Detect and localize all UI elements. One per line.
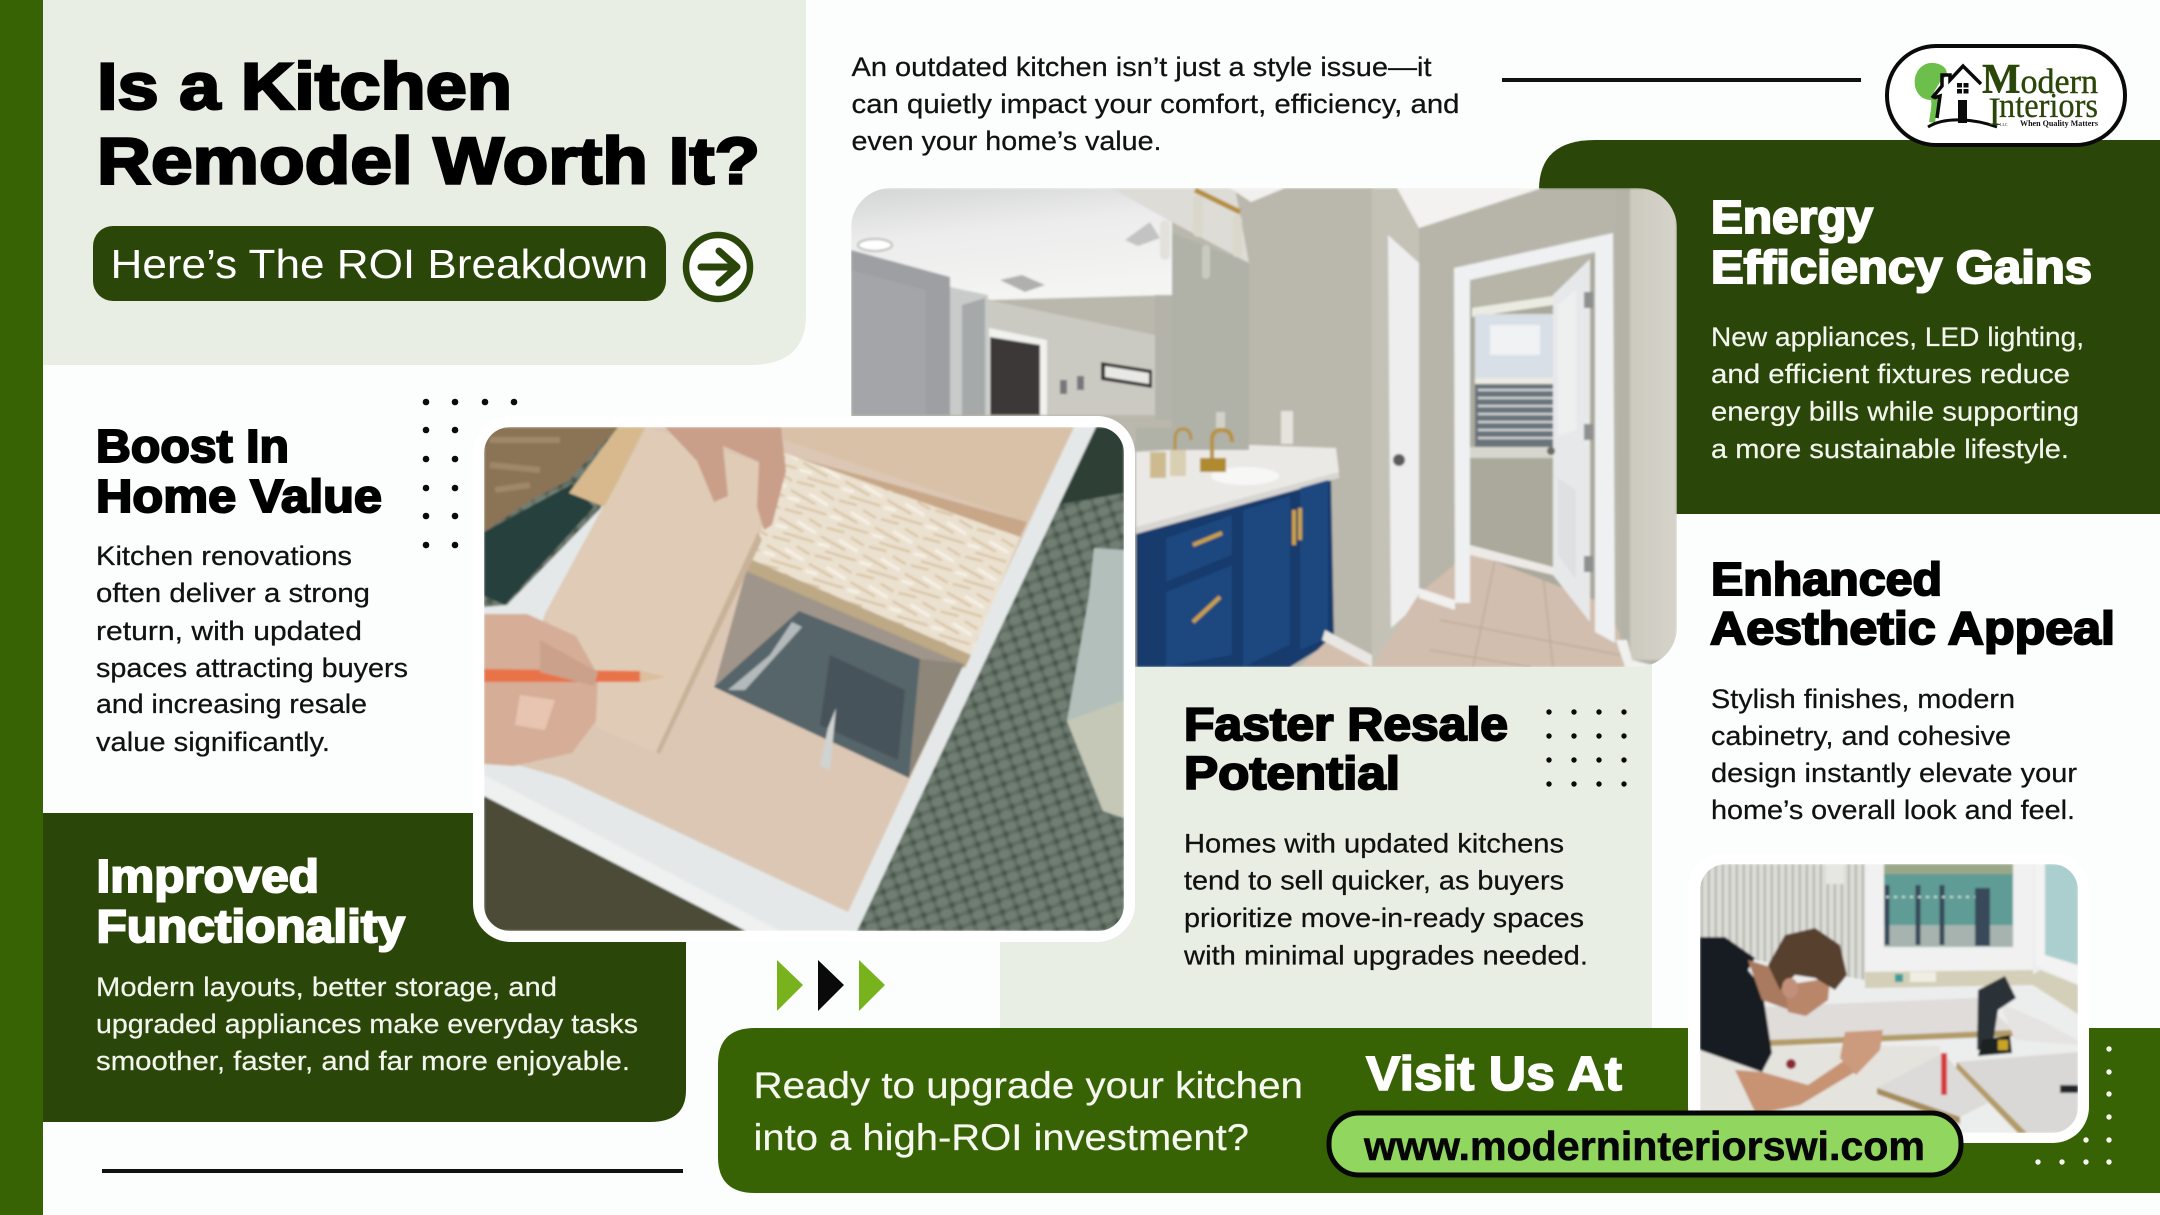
left hand <box>484 614 598 766</box>
left sidebar stripe <box>0 0 43 1215</box>
heading <box>96 420 382 522</box>
body text: Kitchen renovations <box>96 541 352 571</box>
heading: Faster Resale <box>1184 698 1508 750</box>
right wall <box>1620 634 1624 640</box>
heading: Improved <box>96 850 319 902</box>
icon: three arrows <box>777 960 885 1011</box>
aesthetic appeal text <box>1710 553 2115 825</box>
body text: Modern layouts, better storage, and <box>96 972 557 1002</box>
body text <box>1183 828 1588 970</box>
body text: with minimal upgrades needed. <box>1183 940 1588 970</box>
back room wall <box>1419 188 1620 650</box>
body text: energy bills while supporting <box>1711 396 2079 426</box>
hair <box>1768 928 1847 990</box>
body text: smoother, faster, and far more enjoyable. <box>96 1046 630 1076</box>
icon: tree <box>1915 63 1947 123</box>
title heading: Is a Kitchen <box>97 49 512 123</box>
main wall <box>1249 188 1374 667</box>
body text: and efficient fixtures reduce <box>1711 359 2070 389</box>
body text: cabinetry, and cohesive <box>1711 721 2011 751</box>
logo wordmark: Modern <box>1982 57 2098 103</box>
body text: often deliver a strong <box>96 578 370 608</box>
countertop <box>1760 998 2014 1040</box>
right window <box>2035 864 2078 985</box>
heading: Potential <box>1184 747 1400 799</box>
heading: Efficiency Gains <box>1711 241 2092 293</box>
window <box>1472 296 1553 317</box>
light wood panel <box>605 502 607 506</box>
pencil <box>484 669 665 682</box>
open door <box>1553 259 1590 622</box>
column and closet door <box>1372 188 1419 667</box>
url pill: www.moderninteriorswi.com <box>1363 1123 1925 1169</box>
logo wordmark: nteriors <box>1999 86 2098 125</box>
sill <box>1865 970 2033 988</box>
body text: Stylish finishes, modern <box>1711 684 2015 714</box>
body text: a more sustainable lifestyle. <box>1711 434 2069 464</box>
door frame <box>1454 233 1615 643</box>
light fixture <box>1160 190 1242 279</box>
teal cloth <box>484 484 594 605</box>
knit sweater <box>484 427 618 532</box>
body text: New appliances, LED lighting, <box>1711 322 2084 352</box>
body text: value significantly. <box>96 727 330 757</box>
faucet <box>1212 430 1232 470</box>
cloth <box>1066 546 1124 722</box>
counter <box>1136 445 1339 532</box>
top hand <box>665 427 786 530</box>
drill <box>1977 976 2016 1056</box>
photo: wood samples <box>484 427 1124 931</box>
main window <box>1865 864 2033 984</box>
photo: installer <box>1700 864 2078 1133</box>
icon: house <box>1928 66 1997 127</box>
bottom rule <box>102 1169 683 1173</box>
intro text: can quietly impact your comfort, efficiency, and <box>852 89 1460 119</box>
tiled wall <box>1700 864 1865 980</box>
shirt <box>1700 937 1772 1072</box>
body text: tend to sell quicker, as buyers <box>1184 866 1564 896</box>
neck <box>1748 960 1790 1010</box>
book white pages <box>484 427 1096 931</box>
decorative dots: resale <box>1546 709 1627 787</box>
heading: Enhanced <box>1711 553 1942 605</box>
url pill <box>1329 1113 1961 1175</box>
OSB board <box>750 453 1020 655</box>
heading <box>96 850 405 952</box>
photo frame: installer <box>1688 853 2089 1143</box>
panel: energy efficiency background <box>1539 140 2160 514</box>
panel: faster resale background <box>1000 650 1652 1040</box>
panel: call to action band <box>718 1028 2160 1193</box>
heading: Home Value <box>96 470 382 522</box>
body text: spaces attracting buyers <box>96 653 408 683</box>
boost in home value section <box>96 420 408 757</box>
panel: title <box>43 0 806 365</box>
body text <box>96 972 638 1076</box>
subtitle button: Here’s The ROI Breakdown <box>110 241 648 287</box>
body text: home’s overall look and feel. <box>1711 795 2075 825</box>
subtitle button <box>93 226 666 301</box>
intro text: even your home’s value. <box>852 126 1162 156</box>
energy efficiency text <box>1711 191 2092 464</box>
decorative dots: call to action <box>2035 1046 2112 1165</box>
face <box>1785 978 1830 1016</box>
logo wordmark <box>1982 57 2098 134</box>
body text <box>1711 684 2077 825</box>
heading: Energy <box>1711 191 1873 243</box>
body text: and increasing resale <box>96 689 367 719</box>
shower glass <box>950 287 988 415</box>
photo: bathroom <box>851 188 1677 667</box>
call to action question: Ready to upgrade your kitchen <box>754 1064 1303 1106</box>
arm <box>1735 1060 1855 1112</box>
heading: Functionality <box>96 900 405 952</box>
lower page edge lines <box>484 775 780 931</box>
top rule <box>1502 78 1861 82</box>
call to action question: into a high-ROI investment? <box>754 1116 1249 1158</box>
beige page <box>500 427 1074 912</box>
floor <box>1372 552 1640 667</box>
small OSB <box>569 427 645 507</box>
body text: prioritize move-in-ready spaces <box>1184 903 1584 933</box>
ceiling reflection <box>851 188 1172 300</box>
call to action question <box>754 1064 1303 1158</box>
boards <box>1877 1053 1988 1117</box>
panel: faster resale text <box>1183 698 1588 970</box>
print with grey interior <box>714 572 962 687</box>
heading <box>1184 698 1508 799</box>
blue cabinet <box>1136 477 1334 667</box>
decorative dots: boost <box>423 399 517 548</box>
cabinet <box>1700 1046 1940 1133</box>
body text: return, with updated <box>96 616 362 646</box>
logo <box>1887 46 2125 145</box>
reflected door <box>851 250 950 415</box>
inner wall <box>1470 253 1595 600</box>
photo frame: wood samples <box>473 416 1135 942</box>
title heading <box>97 49 760 198</box>
title heading: Remodel Worth It? <box>97 124 760 198</box>
improved functionality text <box>96 850 638 1076</box>
body text: design instantly elevate your <box>1711 758 2077 788</box>
panel: improved functionality background <box>43 813 686 1122</box>
heading: Aesthetic Appeal <box>1710 602 2115 654</box>
body text <box>1711 322 2084 464</box>
heading: Boost In <box>96 420 289 472</box>
body text: Homes with updated kitchens <box>1184 828 1564 858</box>
heading <box>1710 553 2115 654</box>
intro text: An outdated kitchen isn’t just a style issue—it <box>852 52 1432 82</box>
logo wordmark: When Quality Matters <box>2020 119 2098 128</box>
logo wordmark: LLC <box>2000 122 2008 127</box>
body text: upgraded appliances make everyday tasks <box>96 1009 638 1039</box>
icon: arrow in circle <box>686 235 750 299</box>
heading <box>1711 191 2092 293</box>
body text <box>96 541 408 757</box>
mirror wall <box>1173 235 1248 427</box>
visit us heading: Visit Us At <box>1366 1048 1622 1101</box>
intro text <box>852 52 1460 156</box>
back wall <box>988 300 1155 415</box>
logo wordmark: I <box>1988 89 2001 134</box>
